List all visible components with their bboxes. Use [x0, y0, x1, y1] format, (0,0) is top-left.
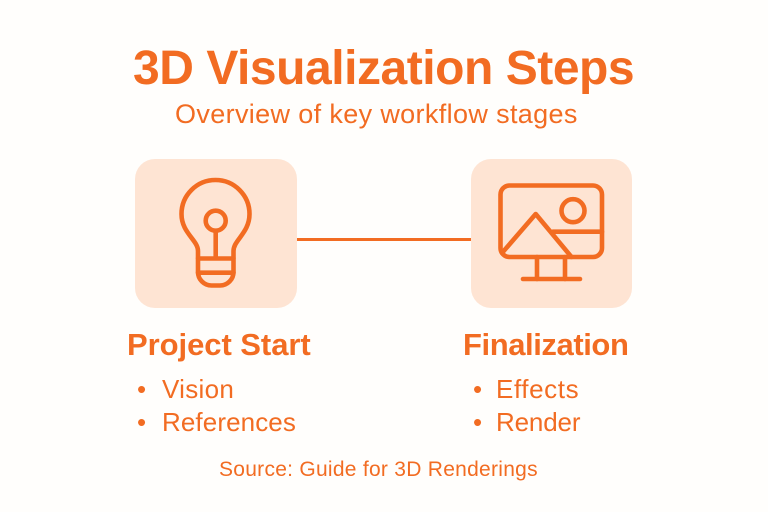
panel: finalization icon — [471, 159, 632, 308]
connector line — [297, 238, 471, 241]
source note: Source: Guide for 3D Renderings — [219, 458, 538, 481]
heading: finalization: Finalization — [463, 327, 628, 362]
heading: project start: Project Start — [127, 327, 311, 362]
icon: light bulb — [179, 178, 252, 288]
list item: references — [137, 407, 296, 437]
list item: references: • — [137, 407, 146, 437]
list item: vision — [137, 374, 234, 404]
subtitle: Overview of key workflow stages — [175, 99, 578, 129]
title: 3D Visualization Steps — [133, 42, 634, 95]
list item: effects — [473, 374, 579, 404]
icon: monitor with image — [498, 183, 604, 282]
list: project start: Vision — [162, 374, 234, 404]
list item: render — [473, 407, 580, 437]
list: finalization — [473, 374, 580, 437]
list: finalization: Effects — [496, 374, 579, 404]
list: project start: References — [162, 407, 296, 437]
list item: render: • — [473, 407, 482, 437]
panel: project start icon — [135, 159, 297, 308]
list: finalization: Render — [496, 407, 580, 437]
list item: vision: • — [137, 374, 146, 404]
list item: effects: • — [473, 374, 482, 404]
list: project start — [137, 374, 296, 437]
